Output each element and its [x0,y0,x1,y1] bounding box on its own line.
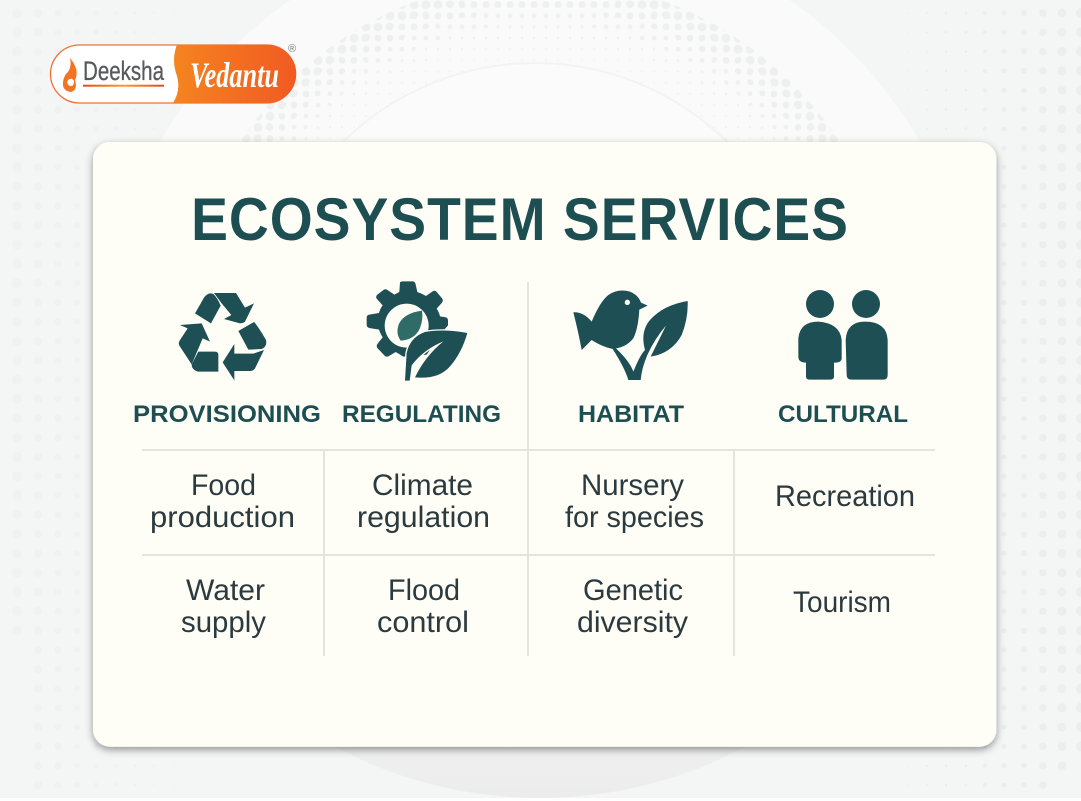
logo: Vedantu wordmark: Vedantu [190,55,279,95]
title: ECOSYSTEM SERVICES [191,187,848,254]
heading: regulating: REGULATING [342,401,501,428]
icon: bird and leaf [573,291,688,380]
cell: flood control: control [377,606,469,639]
cell: nursery for species: Nursery [581,469,684,502]
cell: food production: Food [191,469,256,502]
cell: food production [150,469,295,534]
cell: food production: production [150,501,295,534]
heading: cultural: CULTURAL [778,401,908,428]
cell: genetic diversity: Genetic [583,574,683,607]
cell: nursery for species [565,469,704,534]
cell: water supply: Water [186,574,265,607]
panel background [93,142,996,747]
icon: recycling arrows [179,293,266,380]
heading: habitat: HABITAT [578,401,684,428]
cell: tourism: Tourism [793,586,891,619]
icon: two people [798,290,888,380]
panel: ecosystem services card [93,142,996,747]
cell: climate regulation: Climate [372,469,473,502]
cell: water supply [181,574,266,639]
logo: flame icon [63,58,77,92]
logo: Deeksha wordmark: Deeksha [83,56,165,86]
logo: underline [83,85,164,87]
icon: gear with leaf [367,281,467,381]
logo: orange Vedantu section [173,44,296,103]
cell: genetic diversity [577,574,688,639]
cell: climate regulation: regulation [357,501,490,534]
cell: climate regulation [357,469,490,534]
logo: registered mark: ® [288,43,296,55]
cell: genetic diversity: diversity [577,606,688,639]
cell: flood control [377,574,469,639]
cell: recreation: Recreation [775,480,915,513]
cell: water supply: supply [181,606,266,639]
cell: nursery for species: for species [565,501,704,534]
heading: provisioning: PROVISIONING [133,401,321,428]
cell: flood control: Flood [388,574,460,607]
logo: Deeksha Vedantu [50,43,296,103]
